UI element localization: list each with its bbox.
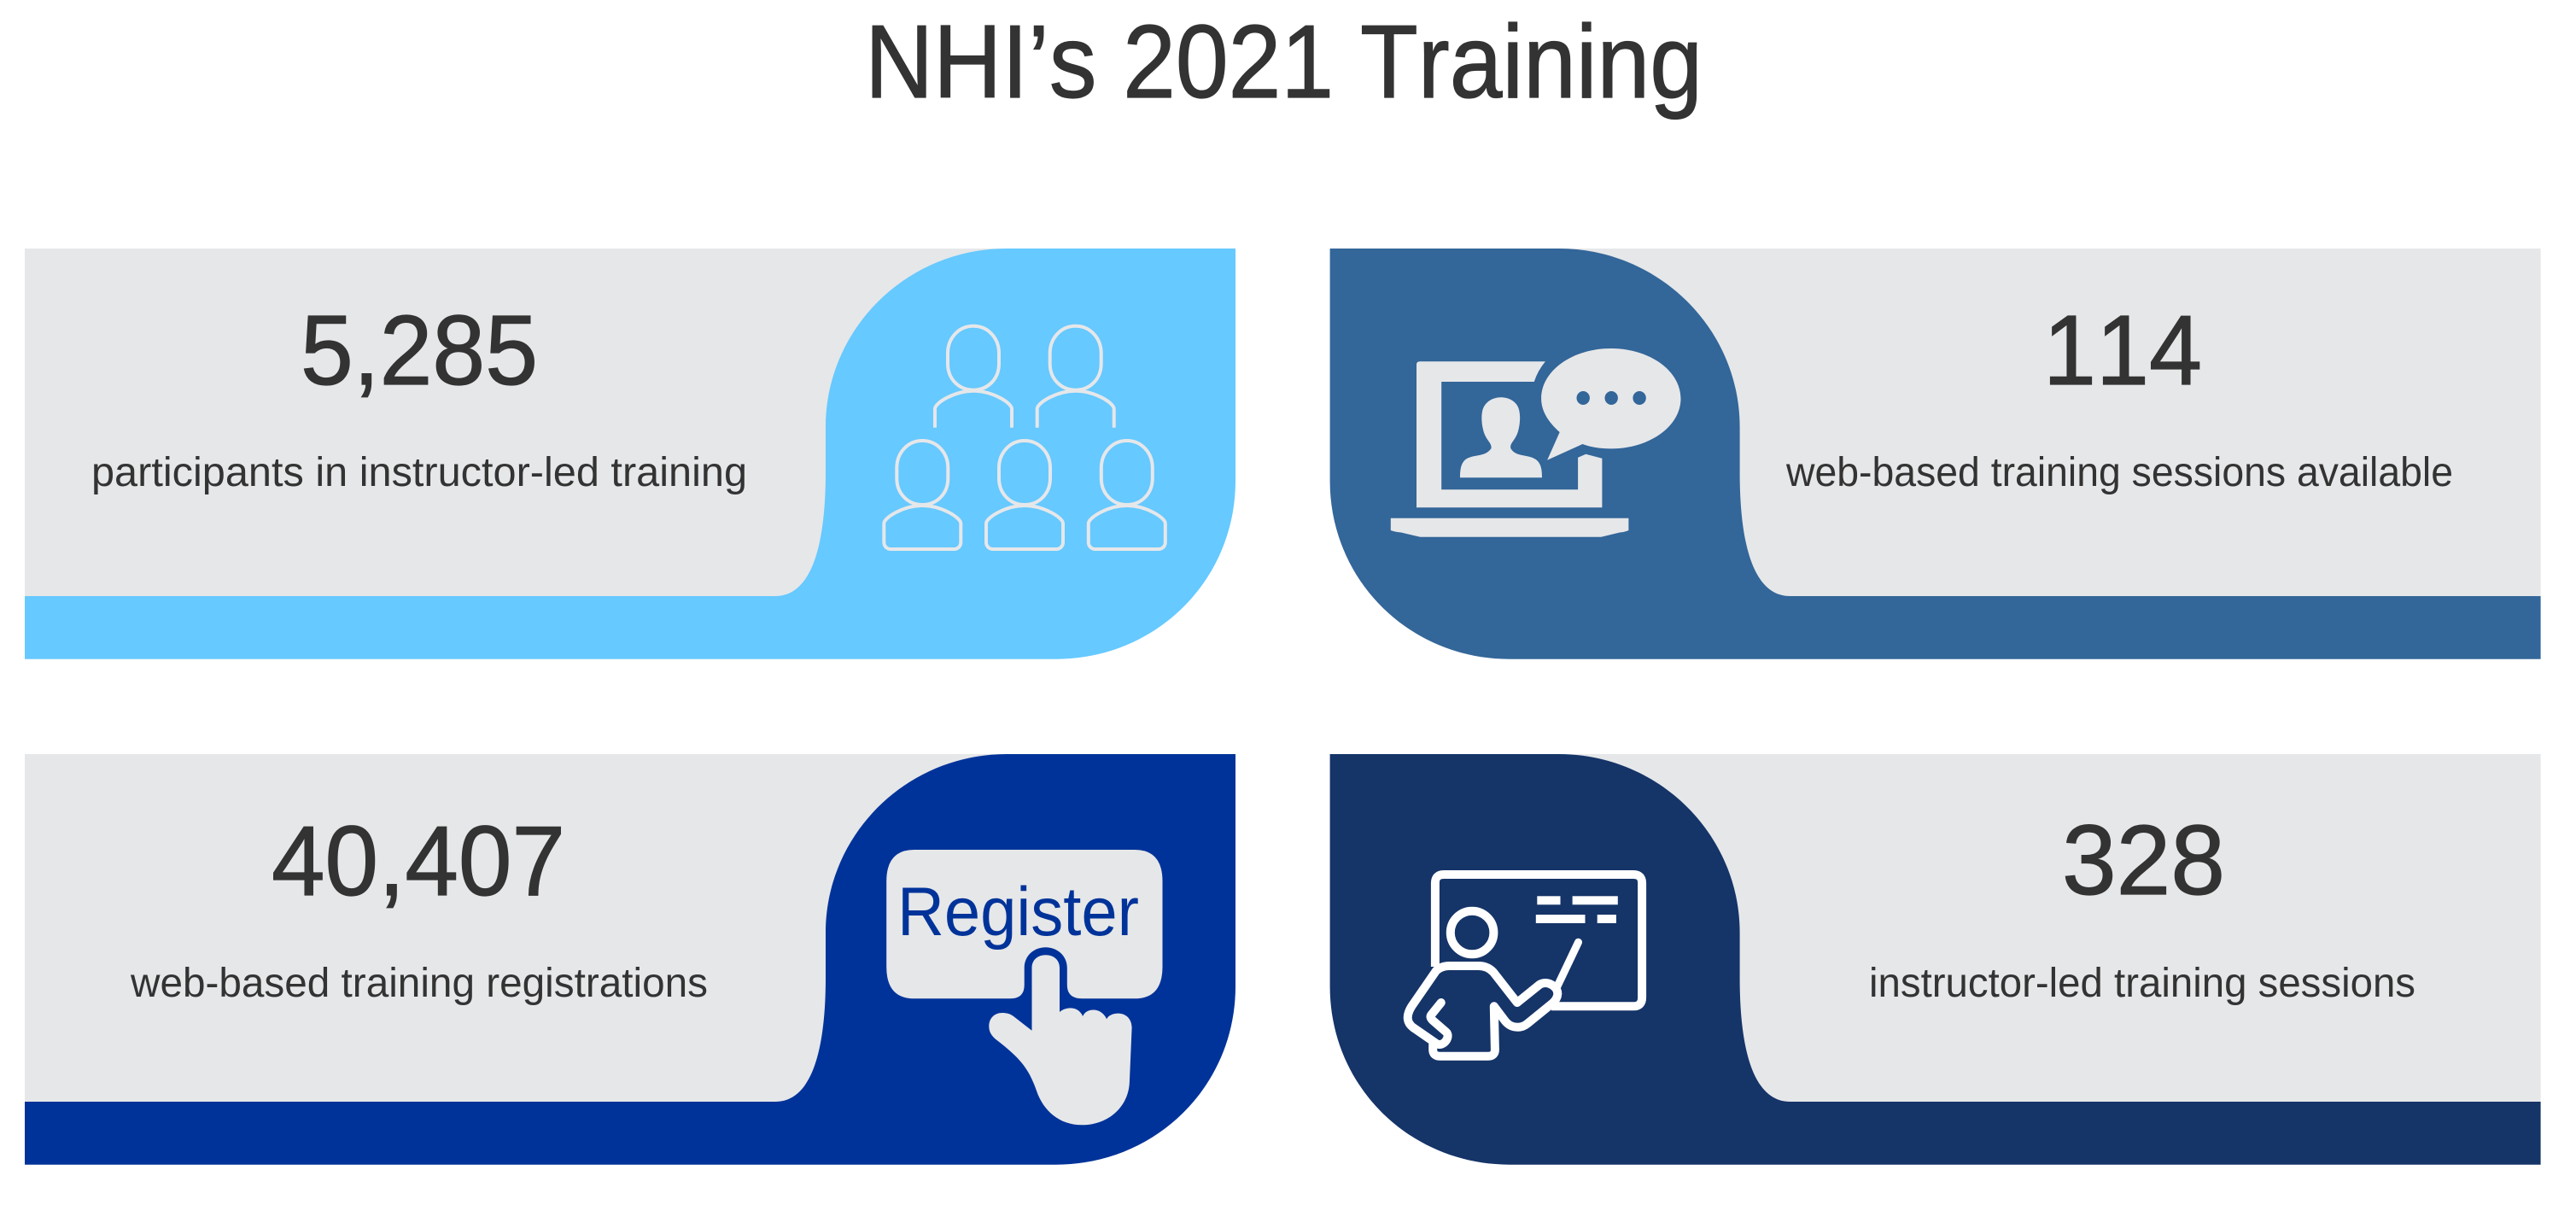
stat number: 40,407: 40,407 — [272, 805, 565, 916]
panel background: grey — [25, 754, 1049, 1113]
icon: group of people — [884, 326, 1165, 549]
board outline — [1435, 875, 1642, 1006]
panel: participants in instructor-led training — [25, 249, 1235, 659]
laptop base — [1391, 518, 1628, 537]
instructor body — [1408, 966, 1557, 1056]
pointer — [1556, 942, 1578, 989]
person: back row left — [935, 326, 1012, 428]
pointing hand — [989, 955, 1132, 1125]
person: front row right — [1089, 441, 1165, 549]
stat label: web-based training registrations — [130, 961, 708, 1006]
panel background: grey — [25, 249, 1049, 607]
instructor head — [1451, 911, 1493, 954]
button text: Register — [897, 874, 1139, 951]
panel background: grey — [1516, 754, 2541, 1113]
icon: laptop with video chat — [1391, 348, 1680, 537]
laptop screen — [1417, 361, 1602, 507]
stat number: 328: 328 — [2062, 804, 2225, 916]
person: front row left — [884, 441, 961, 549]
register button — [886, 850, 1163, 998]
icon: instructor at board — [1408, 875, 1642, 1056]
panel: web-based training registrations — [25, 754, 1235, 1165]
panel background: grey — [1516, 249, 2541, 607]
icon: register button with pointing hand — [886, 850, 1163, 1125]
stat label: instructor-led training sessions — [1869, 961, 2415, 1006]
speech bubble — [1541, 348, 1680, 460]
title: NHI’s 2021 Training — [865, 3, 1703, 120]
person silhouette — [1460, 397, 1542, 477]
stat number: 114: 114 — [2043, 295, 2202, 406]
stat number: 5,285: 5,285 — [301, 295, 538, 406]
stat label: participants in instructor-led training — [91, 450, 747, 495]
panel: web-based training sessions available — [1330, 249, 2541, 659]
panel shape: light blue — [25, 249, 1235, 659]
stat label: web-based training sessions available — [1785, 450, 2453, 495]
person: back row right — [1037, 326, 1114, 428]
panel: instructor-led training sessions — [1330, 754, 2541, 1165]
panel shape: navy — [1330, 754, 2541, 1165]
panel shape: royal blue — [25, 754, 1235, 1165]
speech dots — [1576, 391, 1646, 405]
panel shape: medium blue — [1330, 249, 2541, 659]
person: front row centre — [986, 441, 1063, 549]
board text lines — [1536, 896, 1618, 923]
